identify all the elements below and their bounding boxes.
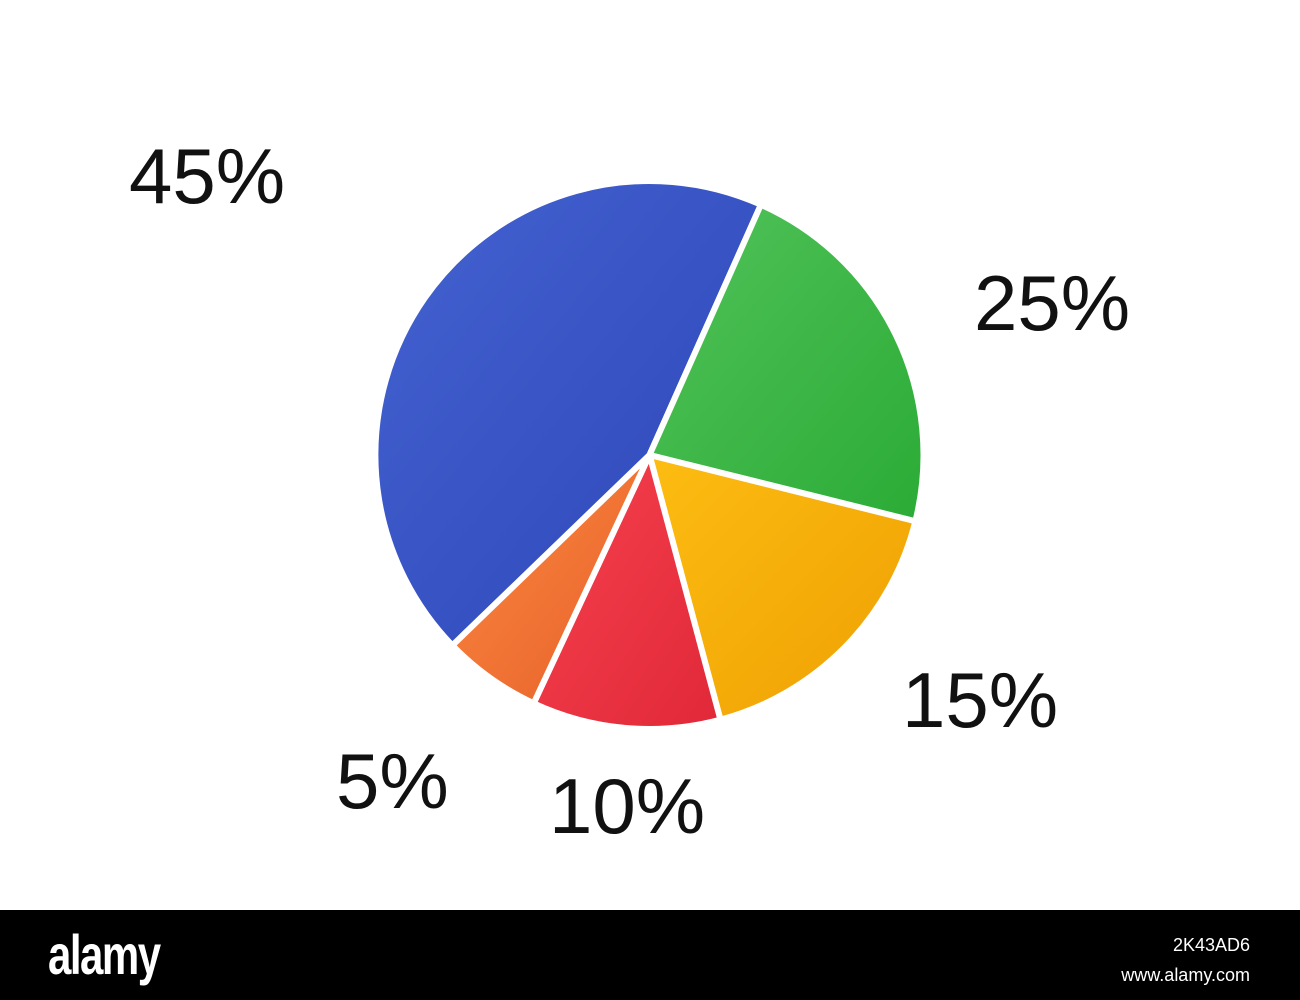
slice: red 10% <box>534 455 720 729</box>
label 10%: 10% <box>549 762 705 850</box>
slice: orange 5% <box>452 455 650 703</box>
slice: green 25% <box>650 205 924 521</box>
footer logo: alamy <box>48 923 160 986</box>
label 15%: 15% <box>902 656 1058 744</box>
label 45%: 45% <box>129 132 285 220</box>
label 5%: 5% <box>336 737 449 825</box>
footer id: 2K43AD6 <box>1173 935 1250 955</box>
label 25%: 25% <box>974 259 1130 347</box>
footer bar <box>0 910 1300 1000</box>
footer id <box>1121 935 1250 985</box>
slice: blue 45% <box>375 181 761 645</box>
slice: yellow 15% <box>650 455 915 720</box>
footer id: www.alamy.com <box>1121 965 1250 985</box>
